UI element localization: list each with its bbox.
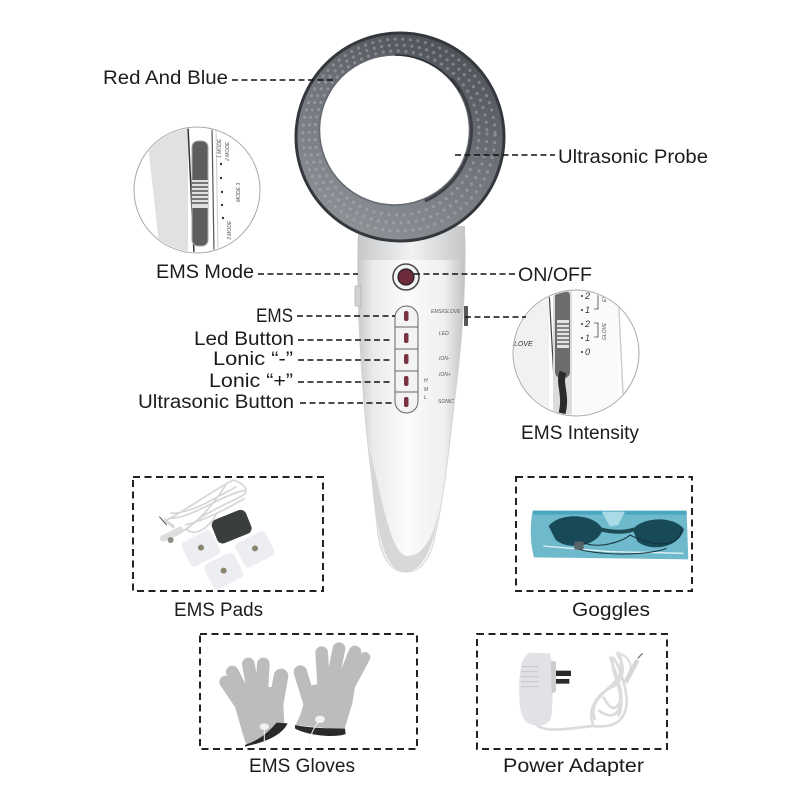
device small labels <box>424 309 461 405</box>
magnifier: EMS intensity switch: 1 <box>585 333 590 343</box>
callout: EMS Intensity: EMS Intensity <box>521 423 639 444</box>
magnifier: EMS intensity switch: 1 <box>585 305 590 315</box>
button panel <box>395 306 418 413</box>
label: EMS Gloves: EMS Gloves <box>249 756 355 777</box>
label: Goggles: Goggles <box>572 600 650 621</box>
callout: Lonic plus: Lonic “+” <box>209 371 293 392</box>
device small labels: L <box>424 395 427 401</box>
magnifier: EMS intensity switch: EMS <box>602 290 608 302</box>
magnifier: EMS mode switch: 3 MODE <box>227 220 233 240</box>
magnifier: EMS intensity switch: LOVE <box>514 341 533 348</box>
device small labels: ION- <box>439 356 450 362</box>
callout: Ultrasonic Button: Ultrasonic Button <box>138 392 294 413</box>
device small labels: ION+ <box>439 372 451 378</box>
magnifier: EMS intensity switch <box>513 290 639 417</box>
probe ring <box>296 33 504 241</box>
magnifier: EMS mode switch <box>134 127 260 253</box>
panel: power adapter <box>477 634 667 777</box>
device neck <box>358 226 465 260</box>
device small labels: M <box>424 387 429 393</box>
callout: EMS <box>256 306 395 327</box>
icon: power adapter <box>519 652 643 730</box>
icon: gloves <box>226 649 365 747</box>
callout: Red And Blue: Red And Blue <box>103 68 228 89</box>
panel: EMS pads <box>133 477 323 621</box>
side slider right <box>464 306 468 326</box>
panel: EMS gloves <box>200 634 417 777</box>
magnifier: EMS intensity switch: 0 <box>585 347 590 357</box>
device small labels: LED <box>439 331 449 337</box>
device small labels: EMS/GLOVE <box>431 309 461 315</box>
magnifier: EMS intensity switch: GLOVE <box>602 322 608 340</box>
handle lower shading <box>370 450 442 572</box>
callout: Led Button: Led Button <box>194 329 294 350</box>
callout: EMS Mode: EMS Mode <box>156 262 254 283</box>
label: Power Adapter: Power Adapter <box>503 756 645 777</box>
device handle <box>358 238 465 572</box>
icon: goggles in case <box>531 511 688 559</box>
device small labels: SONIC <box>438 399 454 405</box>
label: EMS Pads: EMS Pads <box>174 600 263 621</box>
panel: goggles <box>516 477 692 621</box>
power button <box>393 264 419 290</box>
magnifier: EMS mode switch: 2 MODE <box>225 141 231 162</box>
callout: Ultrasonic Probe: Ultrasonic Probe <box>558 147 708 168</box>
side slider left <box>355 286 361 306</box>
device: handheld massager <box>296 33 504 572</box>
magnifier: EMS intensity switch: 2 <box>584 291 590 301</box>
icon: EMS pads and wire <box>159 480 276 591</box>
callout: EMS: EMS <box>256 306 293 327</box>
magnifier: EMS mode switch: MODE 3 <box>236 183 242 202</box>
callout: ON/OFF: ON/OFF <box>518 265 592 286</box>
device small labels: H <box>424 378 428 384</box>
callout: Lonic minus: Lonic “-” <box>213 349 293 370</box>
magnifier: EMS mode switch: 1 MODE <box>217 138 223 158</box>
magnifier: EMS intensity switch: 2 <box>584 319 590 329</box>
